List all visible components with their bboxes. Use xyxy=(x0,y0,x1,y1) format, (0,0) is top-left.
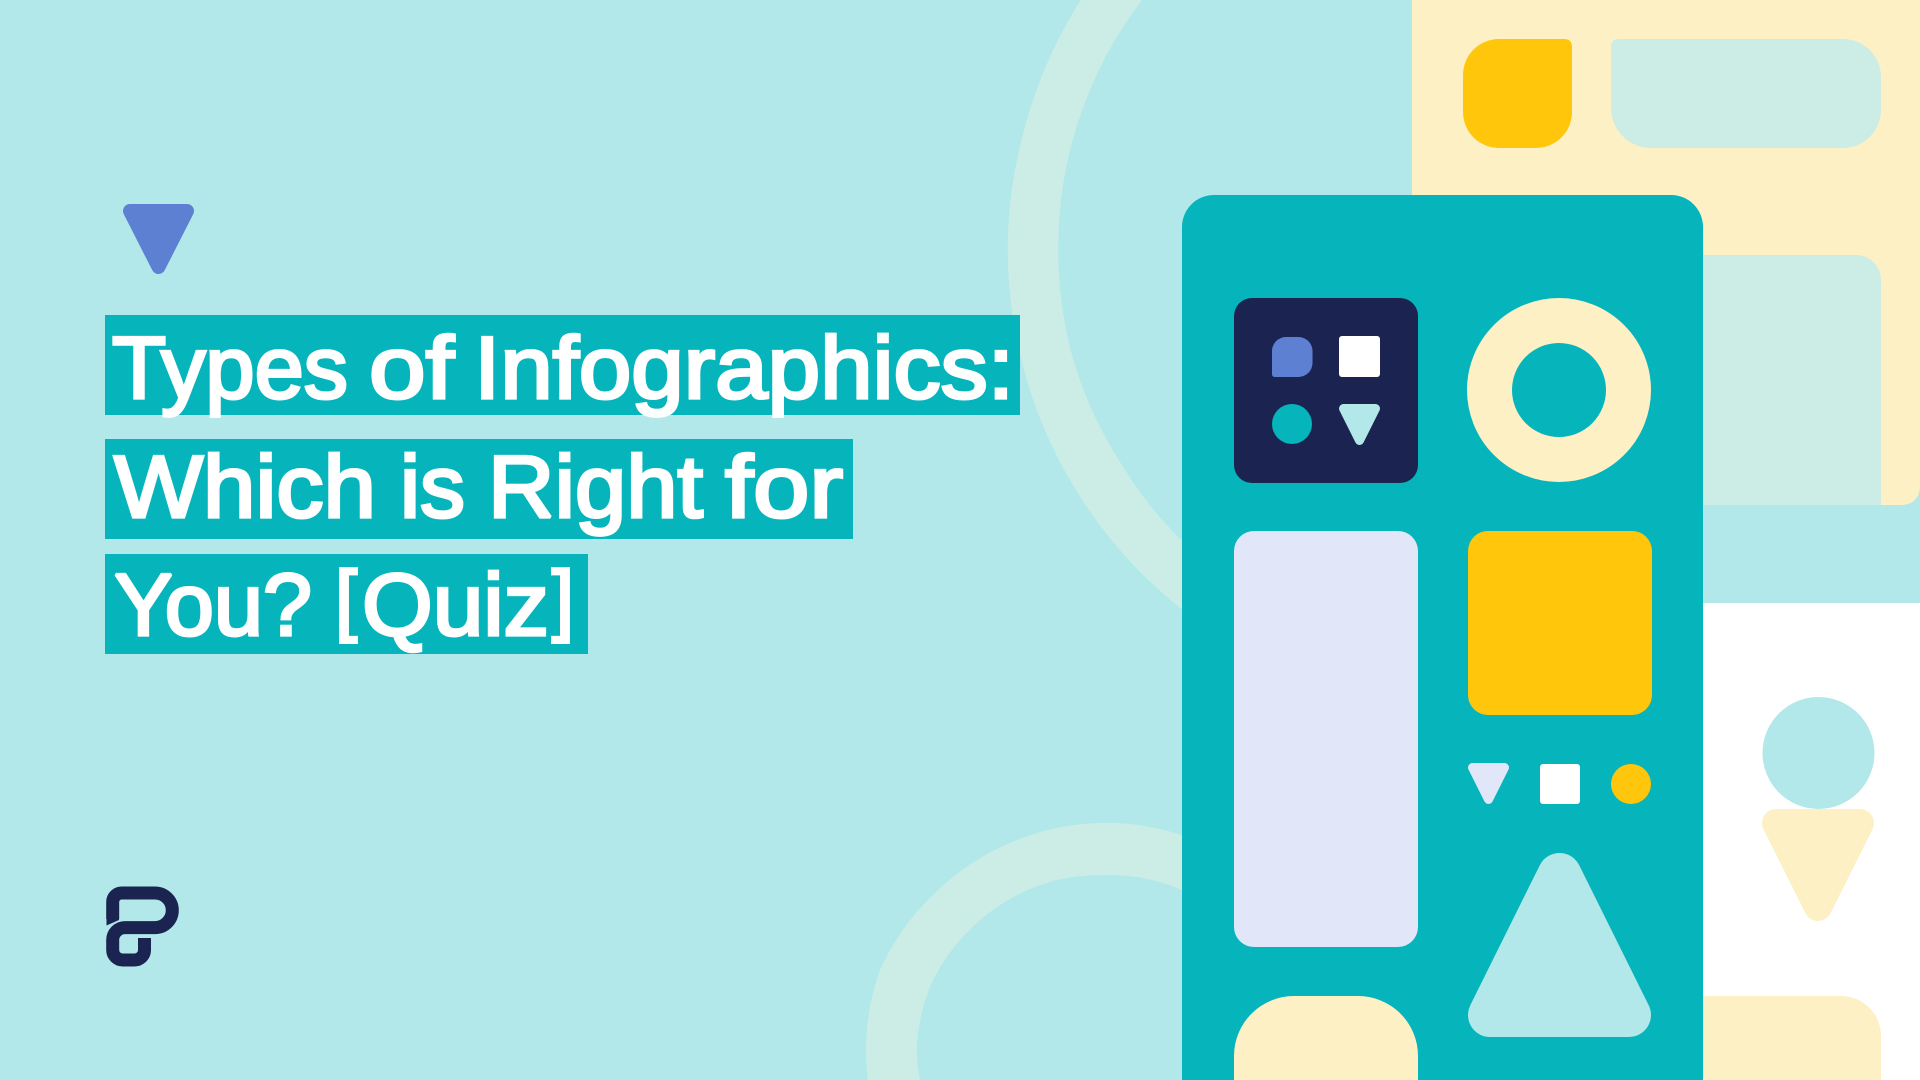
cream ring xyxy=(1490,320,1628,460)
lavender tall tile xyxy=(1234,531,1418,947)
small white square xyxy=(1540,764,1580,804)
title line 3: [ xyxy=(335,554,357,643)
panel: cream backdrop xyxy=(1412,0,1920,505)
panel: white lower right xyxy=(1700,603,1920,1080)
pale green pill xyxy=(1611,39,1881,148)
icon: logo xyxy=(106,893,172,960)
panel: main teal card xyxy=(1182,195,1703,1080)
title line 3: Quiz xyxy=(362,555,549,654)
title line 3: ] xyxy=(552,554,574,643)
icon: blue triangle xyxy=(130,211,187,267)
decorative lower ring xyxy=(866,823,1195,1080)
title line 3: You? xyxy=(114,555,312,654)
title line 1 xyxy=(105,315,1020,417)
navy icon tile xyxy=(1234,298,1418,483)
teal circle xyxy=(1272,404,1312,444)
title line 2: for xyxy=(725,437,843,536)
cream bottom tile xyxy=(1700,996,1881,1080)
blue rounded square xyxy=(1272,337,1312,377)
light circle xyxy=(1762,697,1874,809)
title line 1: of xyxy=(369,318,455,417)
title line 1: Infographics: xyxy=(474,318,1014,417)
large light triangle xyxy=(1490,875,1629,1015)
yellow square tile xyxy=(1468,531,1652,715)
decorative large ring xyxy=(1008,0,1195,619)
light triangle xyxy=(1344,408,1376,440)
cream arch xyxy=(1234,996,1418,1080)
title line 3 xyxy=(105,554,588,654)
yellow rounded tile xyxy=(1463,39,1572,148)
white square xyxy=(1339,336,1380,377)
title line 2: is xyxy=(400,437,465,536)
pale green block xyxy=(1600,255,1881,505)
title line 2: Right xyxy=(488,437,703,536)
small yellow circle xyxy=(1611,764,1651,804)
small lavender triangle xyxy=(1472,768,1504,800)
cream triangle xyxy=(1776,823,1860,907)
title line 1: Types xyxy=(112,318,348,417)
title xyxy=(105,315,1020,654)
title line 2: Which xyxy=(114,437,376,536)
title line 2 xyxy=(105,437,853,539)
